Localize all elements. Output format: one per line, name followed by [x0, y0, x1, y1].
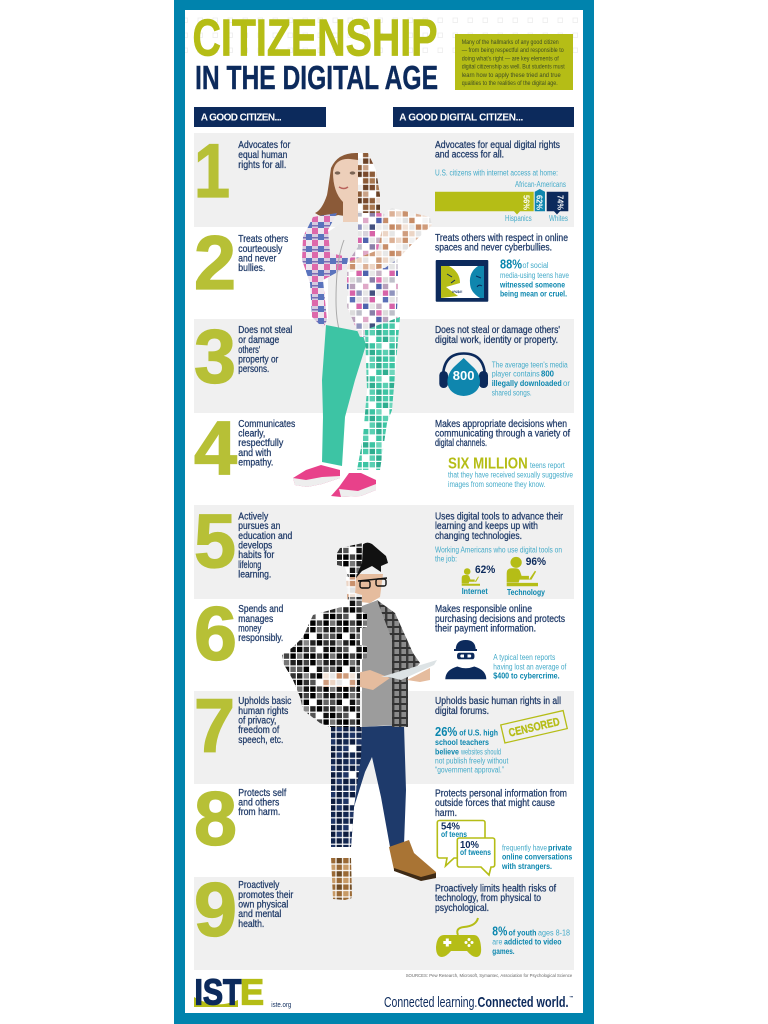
band [194, 319, 574, 413]
good citizen text: habits for [238, 550, 275, 561]
good citizen text: Communicates [238, 419, 295, 430]
good citizen text: Protects self [238, 788, 287, 799]
mosaic: boot [331, 857, 352, 900]
good citizen text: respectfully [238, 438, 283, 449]
good citizen text: responsibly. [238, 633, 283, 644]
good citizen text: and others [238, 798, 279, 808]
digital citizen text: Makes appropriate decisions when [435, 419, 567, 430]
stat: 88%: being mean or cruel. [500, 289, 567, 298]
plaid shirt [377, 600, 420, 727]
digital citizen text: technology, from physical to [435, 893, 541, 904]
good citizen text: bullies. [238, 263, 265, 274]
stat: 26%: believe [435, 747, 459, 756]
stat: 88%: 88% [500, 256, 522, 272]
good citizen text [238, 140, 291, 171]
stat: 8%: addicted to video [504, 938, 562, 947]
stat: six million: that they have received sexually suggestive [448, 471, 573, 480]
icon: cyberbullying screen [436, 260, 488, 302]
band [194, 877, 574, 970]
stat: 800 songs: 800 [541, 370, 555, 379]
good citizen text: Spends and [238, 604, 283, 615]
icon: cyberbullying screen: #%$#! [452, 290, 462, 294]
sources: SOURCES: Pew Research, Microsoft, Symantec, Association for Psychological Science [406, 973, 573, 979]
good citizen text: others' [238, 345, 260, 356]
panel: row 1 [194, 129, 574, 227]
figure: girl [293, 153, 432, 497]
good citizen text: empathy. [238, 458, 273, 468]
panel: row 2 [194, 221, 569, 306]
digital citizen text: changing technologies. [435, 531, 522, 542]
stat: 26%: school teachers [435, 738, 489, 747]
good citizen text: and with [238, 448, 271, 459]
icon: game controller [436, 918, 481, 957]
stat: private conversations: frequently have [502, 843, 547, 852]
good citizen text: Treats others [238, 234, 288, 245]
panel: row 7 [194, 684, 574, 784]
bubble: 54% of teens [437, 820, 485, 866]
good citizen text: Upholds basic [238, 696, 291, 707]
band [194, 691, 574, 784]
mosaic: hair [358, 153, 380, 213]
good citizen text: human rights [238, 706, 288, 717]
digital citizen text [435, 233, 568, 254]
stat: 26%: websites should [460, 747, 501, 756]
stat: private conversations: with strangers. [501, 862, 552, 871]
chart: digital tools on the job: 62% [475, 564, 495, 576]
good citizen text: courteously [238, 244, 282, 255]
stat: private conversations [501, 843, 573, 871]
band [194, 505, 574, 599]
stat: 800 songs: illegally downloaded [492, 379, 562, 388]
t-shirt [362, 600, 392, 727]
bubble: 10% of tweens [457, 838, 495, 875]
logo: ISTE: iste.org [271, 1000, 291, 1009]
bar chart: internet access: 62% [534, 195, 544, 210]
chart: digital tools on the job: Working Americans who use digital tools on [435, 545, 562, 554]
digital citizen text: Does not steal or damage others' [435, 325, 560, 336]
stat: 800 songs: or [563, 379, 570, 388]
digital citizen text: Protects personal information from [435, 788, 567, 800]
digital citizen text: Uses digital tools to advance their [435, 512, 564, 522]
chart: digital tools on the job: Technology [507, 588, 545, 597]
stat: 88%: media-using teens have [500, 271, 569, 280]
digital citizen text: Upholds basic human rights in all [435, 696, 561, 707]
good citizen text: rights for all. [238, 160, 286, 171]
tablet [381, 660, 437, 680]
good citizen text: money [238, 624, 261, 634]
mosaic: shirt and arm [347, 213, 398, 337]
good citizen text: persons. [238, 364, 269, 375]
good citizen text: freedom of [238, 725, 280, 736]
digital citizen text: purchasing decisions and protects [435, 614, 565, 625]
digital citizen text: spaces and never cyberbullies. [435, 242, 552, 254]
white page panel [185, 10, 583, 1013]
stat: private conversations: online conversations [502, 853, 573, 862]
numeral 9: 9 [194, 868, 237, 953]
digital citizen text [435, 884, 556, 914]
good citizen text [238, 696, 291, 746]
bar chart: internet access [435, 169, 568, 223]
stat: 26% [435, 724, 509, 775]
stat: $400 [493, 653, 567, 681]
numeral 8: 8 [194, 777, 237, 862]
digital citizen text: digital work, identity or property. [435, 335, 558, 346]
mosaic: leg [331, 727, 362, 847]
digital citizen text: Advocates for equal digital rights [435, 140, 560, 151]
digital citizen text [435, 419, 570, 449]
stat: 8%: games. [492, 947, 515, 956]
logo: ISTE: IST [194, 972, 242, 1012]
title: CITIZENSHIP [192, 10, 438, 68]
stat: 800 songs: player contains [492, 370, 540, 379]
logo: ISTE: E [240, 972, 264, 1012]
teal jeans [322, 325, 366, 466]
good citizen text: from harm. [238, 807, 280, 818]
digital citizen text [435, 696, 561, 717]
digital citizen text [435, 512, 564, 542]
good citizen text [238, 512, 292, 580]
good citizen text [238, 419, 295, 468]
mosaic: teal leg [357, 317, 400, 470]
plaid shirt [302, 213, 348, 328]
t-shirt [328, 222, 358, 332]
good citizen text: property or [238, 354, 279, 366]
chart: digital tools on the job: 96% [526, 556, 546, 568]
icon: headphones 800: 800 [453, 369, 475, 383]
digital citizen text: learning and keeps up with [435, 521, 538, 532]
good citizen text: speech, etc. [238, 735, 283, 746]
digital citizen text: Treats others with respect in online [435, 233, 568, 244]
stat: 800 songs: shared songs. [492, 388, 532, 397]
bar chart: internet access: Hispanics [505, 214, 532, 223]
good citizen text: pursues an [238, 521, 280, 532]
panel: row 8 [194, 777, 573, 875]
good citizen text: develops [238, 540, 272, 552]
stat: 8%: of youth [508, 929, 537, 938]
intro box: learn how to apply these tried and true [462, 72, 561, 79]
stat: $400: $400 to cybercrime. [493, 672, 560, 681]
tagline: ™ [569, 995, 574, 1000]
title [192, 10, 438, 97]
good citizen text: education and [238, 531, 292, 542]
intro box [455, 34, 573, 90]
stat: 88%: witnessed someone [499, 280, 565, 289]
stat: six million: teens report [530, 461, 565, 470]
digital citizen text: and access for all. [435, 150, 504, 160]
title: IN THE DIGITAL AGE [195, 60, 438, 97]
digital citizen text: outside forces that might cause [435, 798, 555, 809]
bubble: 54% of teens: of teens [441, 830, 467, 839]
stat: 800 songs [492, 360, 570, 397]
stat: 26%: of U.S. high [459, 728, 498, 738]
header: a good digital citizen [393, 107, 574, 127]
numeral 1: 1 [194, 129, 230, 214]
mosaic: arm [323, 673, 357, 687]
glasses [358, 578, 387, 588]
stat: 88% [499, 256, 569, 298]
intro box: Many of the hallmarks of any good citizen [462, 39, 559, 46]
good citizen text [238, 234, 288, 274]
band [194, 133, 574, 227]
figure: boy [282, 543, 437, 900]
bubble: 10% of tweens: 10% [460, 840, 479, 851]
icon: internet user [462, 568, 480, 586]
jeans [349, 725, 406, 847]
intro box: doing what's right — are key elements of [462, 56, 559, 62]
stat: $400: having lost an average of [493, 662, 567, 671]
stat: 26%: not publish freely without [435, 757, 509, 766]
digital citizen text: psychological. [435, 903, 489, 914]
panel: row 4 [194, 406, 573, 491]
pink sneaker right [331, 473, 376, 497]
stat: 26%: 26% [435, 724, 458, 739]
face [333, 159, 358, 224]
bubble: 10% of tweens: of tweens [460, 848, 491, 857]
intro box: digital citizenship as well. But students must [462, 64, 565, 70]
boot right [389, 840, 436, 881]
stat: six million [448, 456, 573, 489]
digital citizen text: their payment information. [435, 624, 536, 634]
stat: 88%: of social [522, 261, 549, 270]
stat: 8%: are [492, 938, 503, 947]
good citizen text: manages [238, 614, 273, 625]
chart: digital tools on the job: Internet [462, 587, 488, 596]
digital citizen text [435, 325, 560, 346]
chart: digital tools on the job: the job: [435, 555, 457, 564]
hands [357, 668, 430, 690]
numeral 5: 5 [194, 500, 236, 584]
good citizen text [238, 880, 294, 930]
panel: row 5 [194, 500, 574, 599]
stat: private conversations: private [548, 843, 573, 852]
good citizen text: Proactively [238, 880, 279, 891]
stat: six million: images from someone they know. [448, 480, 545, 489]
good citizen text: or damage [238, 335, 280, 346]
stamp: censored [501, 711, 567, 743]
blue frame [174, 0, 594, 1024]
hair [315, 153, 358, 218]
hair [356, 543, 388, 578]
stat: 8%: ages 8-18 [538, 929, 570, 938]
digital citizen text: harm. [435, 808, 457, 819]
digital citizen text: Makes responsible online [435, 604, 532, 615]
header: a good citizen [194, 107, 326, 127]
panel: row 3 [194, 314, 574, 413]
good citizen text: own physical [238, 900, 288, 910]
icon: technology user [507, 557, 538, 586]
good citizen text: equal human [238, 150, 287, 161]
digital citizen text: Proactively limits health risks of [435, 884, 556, 894]
stamp: censored: CENSORED [508, 716, 561, 740]
good citizen text: Advocates for [238, 140, 291, 151]
good citizen text: and never [238, 254, 277, 264]
tagline: Connected learning. [384, 994, 477, 1011]
digital citizen text [435, 140, 560, 160]
face [355, 574, 383, 603]
headphone cord [336, 240, 352, 350]
good citizen text: Does not steal [238, 325, 292, 336]
good citizen text: Actively [238, 512, 268, 522]
digital citizen text [435, 788, 567, 819]
bubble: 54% of teens: 54% [441, 822, 460, 832]
stat: 8% [492, 924, 570, 956]
stat: 8%: 8% [492, 924, 508, 938]
header: a good citizen: A GOOD CITIZEN... [201, 113, 282, 124]
good citizen text [238, 604, 283, 644]
good citizen text: health. [238, 919, 264, 930]
good citizen text: of privacy, [238, 716, 276, 726]
pink sneaker left [293, 465, 340, 487]
stat: six million: SIX MILLION [448, 456, 528, 472]
panel: row 6 [194, 592, 567, 681]
icon: burglar [445, 640, 486, 679]
mosaic: head [337, 543, 363, 577]
good citizen text [238, 788, 287, 818]
good citizen text: learning. [238, 570, 271, 580]
bar chart: internet access: 74% [556, 195, 566, 210]
chart: digital tools on the job [435, 545, 562, 597]
speech bubbles [437, 820, 495, 875]
bar chart: internet access: U.S. citizens with internet access at home: [435, 169, 558, 178]
bar chart: internet access: African-Americans [515, 180, 566, 189]
intro box: qualities to the realities of the digital age. [462, 80, 558, 87]
digital citizen text: communicating through a variety of [435, 428, 570, 440]
numeral 2: 2 [194, 221, 236, 306]
good citizen text: and mental [238, 909, 281, 920]
good citizen text [238, 325, 292, 375]
header: a good digital citizen: A GOOD DIGITAL CITIZEN... [399, 113, 524, 124]
numeral 6: 6 [194, 592, 237, 677]
digital citizen text: digital forums. [435, 706, 489, 717]
tagline: Connected world. [478, 994, 568, 1011]
mosaic: neck [346, 577, 362, 610]
good citizen text: promotes their [238, 890, 294, 901]
numeral 3: 3 [194, 314, 236, 400]
intro box: — from being respectful and responsible to [462, 47, 564, 54]
logo: ISTE [194, 972, 291, 1012]
panel: row 9 [194, 868, 574, 970]
mosaic: torso [282, 597, 367, 727]
good citizen text: clearly, [238, 428, 265, 440]
good citizen text: lifelong [238, 560, 261, 571]
mosaic: raised hand [347, 208, 432, 272]
stat: 800 songs: The average teen's media [492, 360, 568, 369]
numeral 4: 4 [194, 406, 237, 491]
numeral 7: 7 [194, 684, 235, 769]
digital citizen text [435, 604, 565, 634]
icon: headphones 800 [439, 354, 488, 396]
bar chart: internet access: 56% [522, 195, 532, 210]
digital citizen text: digital channels. [435, 438, 487, 449]
bar chart: internet access: Whites [549, 214, 568, 223]
stat: 26%: “government approval.” [435, 766, 504, 775]
stat: $400: A typical teen reports [493, 653, 555, 662]
